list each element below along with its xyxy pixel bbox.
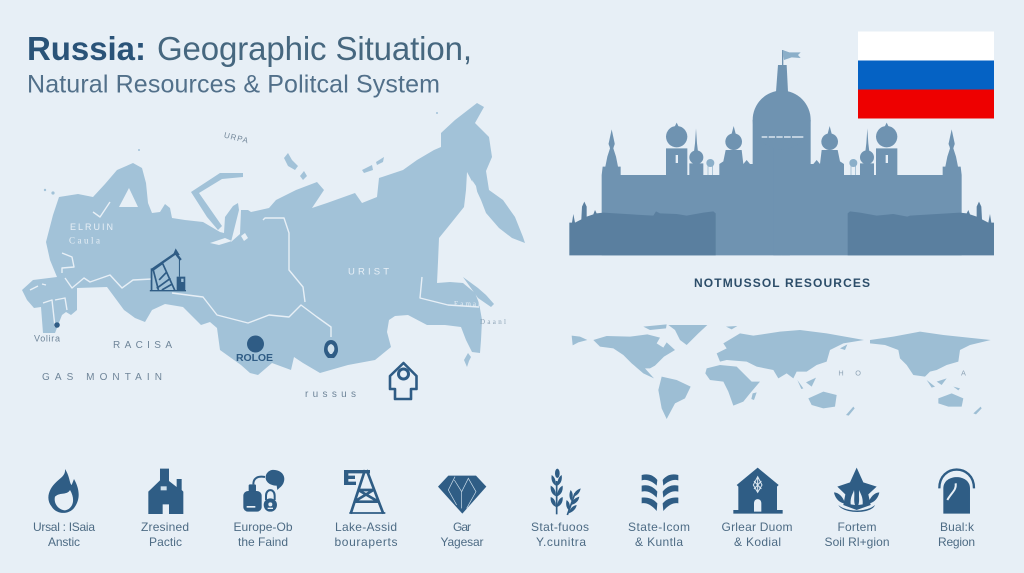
- title: [27, 30, 472, 98]
- item: bottle and lock: the Faind: [238, 535, 288, 549]
- map labels: Volira: [34, 334, 60, 344]
- item: diamond: Yagesar: [440, 535, 484, 549]
- item: diamond: Gar: [453, 520, 471, 534]
- world map labels: [838, 369, 966, 378]
- map labels: URPA: [223, 131, 250, 146]
- icon row: [33, 468, 975, 549]
- icon: badge: [324, 340, 338, 358]
- item: star soil: [824, 468, 890, 549]
- heading: resources: NOTMUSSOL RESOURCES: [694, 276, 870, 290]
- item: church: [722, 468, 792, 549]
- item: diamond: [438, 476, 486, 549]
- palace silhouette: [569, 50, 994, 255]
- map labels: RACISA: [113, 340, 172, 351]
- map labels: URIST: [348, 266, 389, 278]
- item: bottle and lock: [234, 470, 293, 549]
- item: star soil: Fortem: [838, 520, 876, 534]
- item: arched gate: Bual:k: [940, 520, 975, 534]
- flag of Russia: [858, 32, 994, 118]
- map labels: ROLOE: [236, 352, 273, 364]
- icon: city circle: [247, 336, 264, 352]
- map labels: [34, 131, 506, 400]
- item: wheat: Stat-fuoos: [531, 520, 589, 534]
- world map labels: H O: [838, 369, 861, 378]
- item: church: Grlear Duom: [722, 520, 792, 534]
- palace front wings: [569, 202, 994, 255]
- icon: house arrow: [390, 363, 416, 399]
- continents: [572, 324, 991, 419]
- palace flag and ornaments: [706, 50, 857, 175]
- item: flame: Anstic: [48, 535, 80, 549]
- item: house: Pactic: [149, 535, 182, 549]
- item: flame: Ursal : ISaia: [33, 520, 95, 534]
- item: wheat: Y.cunitra: [536, 535, 586, 549]
- world map labels: A: [961, 369, 966, 378]
- item: star soil: Soil Rl+gion: [824, 535, 890, 549]
- item: arched gate: Region: [938, 535, 975, 549]
- map landmass: [22, 103, 525, 375]
- title: Natural Resources & Politcal System: [27, 70, 440, 98]
- palace details: [676, 136, 888, 163]
- title: Geographic Situation,: [157, 30, 472, 67]
- map labels: Caula: [69, 236, 100, 246]
- item: book leaves: & Kuntla: [635, 535, 683, 549]
- title: Russia:: [27, 30, 146, 67]
- item: bottle and lock: Europe-Ob: [234, 520, 293, 534]
- inner lakes and rivers: [119, 180, 478, 245]
- map labels: Daanl: [480, 318, 506, 326]
- item: oil derrick: [334, 470, 398, 549]
- map: Russia: [22, 103, 525, 400]
- map labels: GAS MONTAIN: [42, 372, 162, 383]
- icon: marker pin: [54, 322, 60, 328]
- item: book leaves: [628, 474, 690, 549]
- item: book leaves: State-Icom: [628, 520, 690, 534]
- map labels: ELRUIN: [70, 222, 113, 232]
- item: wheat: [531, 469, 589, 549]
- item: house: Zresined: [141, 520, 189, 534]
- item: church: & Kodial: [734, 535, 781, 549]
- item: oil derrick: Lake-Assid: [335, 520, 397, 534]
- item: flame: [33, 469, 95, 549]
- item: house: [141, 469, 189, 549]
- item: oil derrick: bouraperts: [334, 535, 398, 549]
- map labels: russus: [305, 389, 356, 400]
- map labels: Eamal: [454, 300, 480, 308]
- palace main building: [602, 50, 962, 255]
- world map: [572, 324, 991, 419]
- icon: oil rig: [150, 248, 186, 291]
- item: arched gate: [938, 470, 975, 549]
